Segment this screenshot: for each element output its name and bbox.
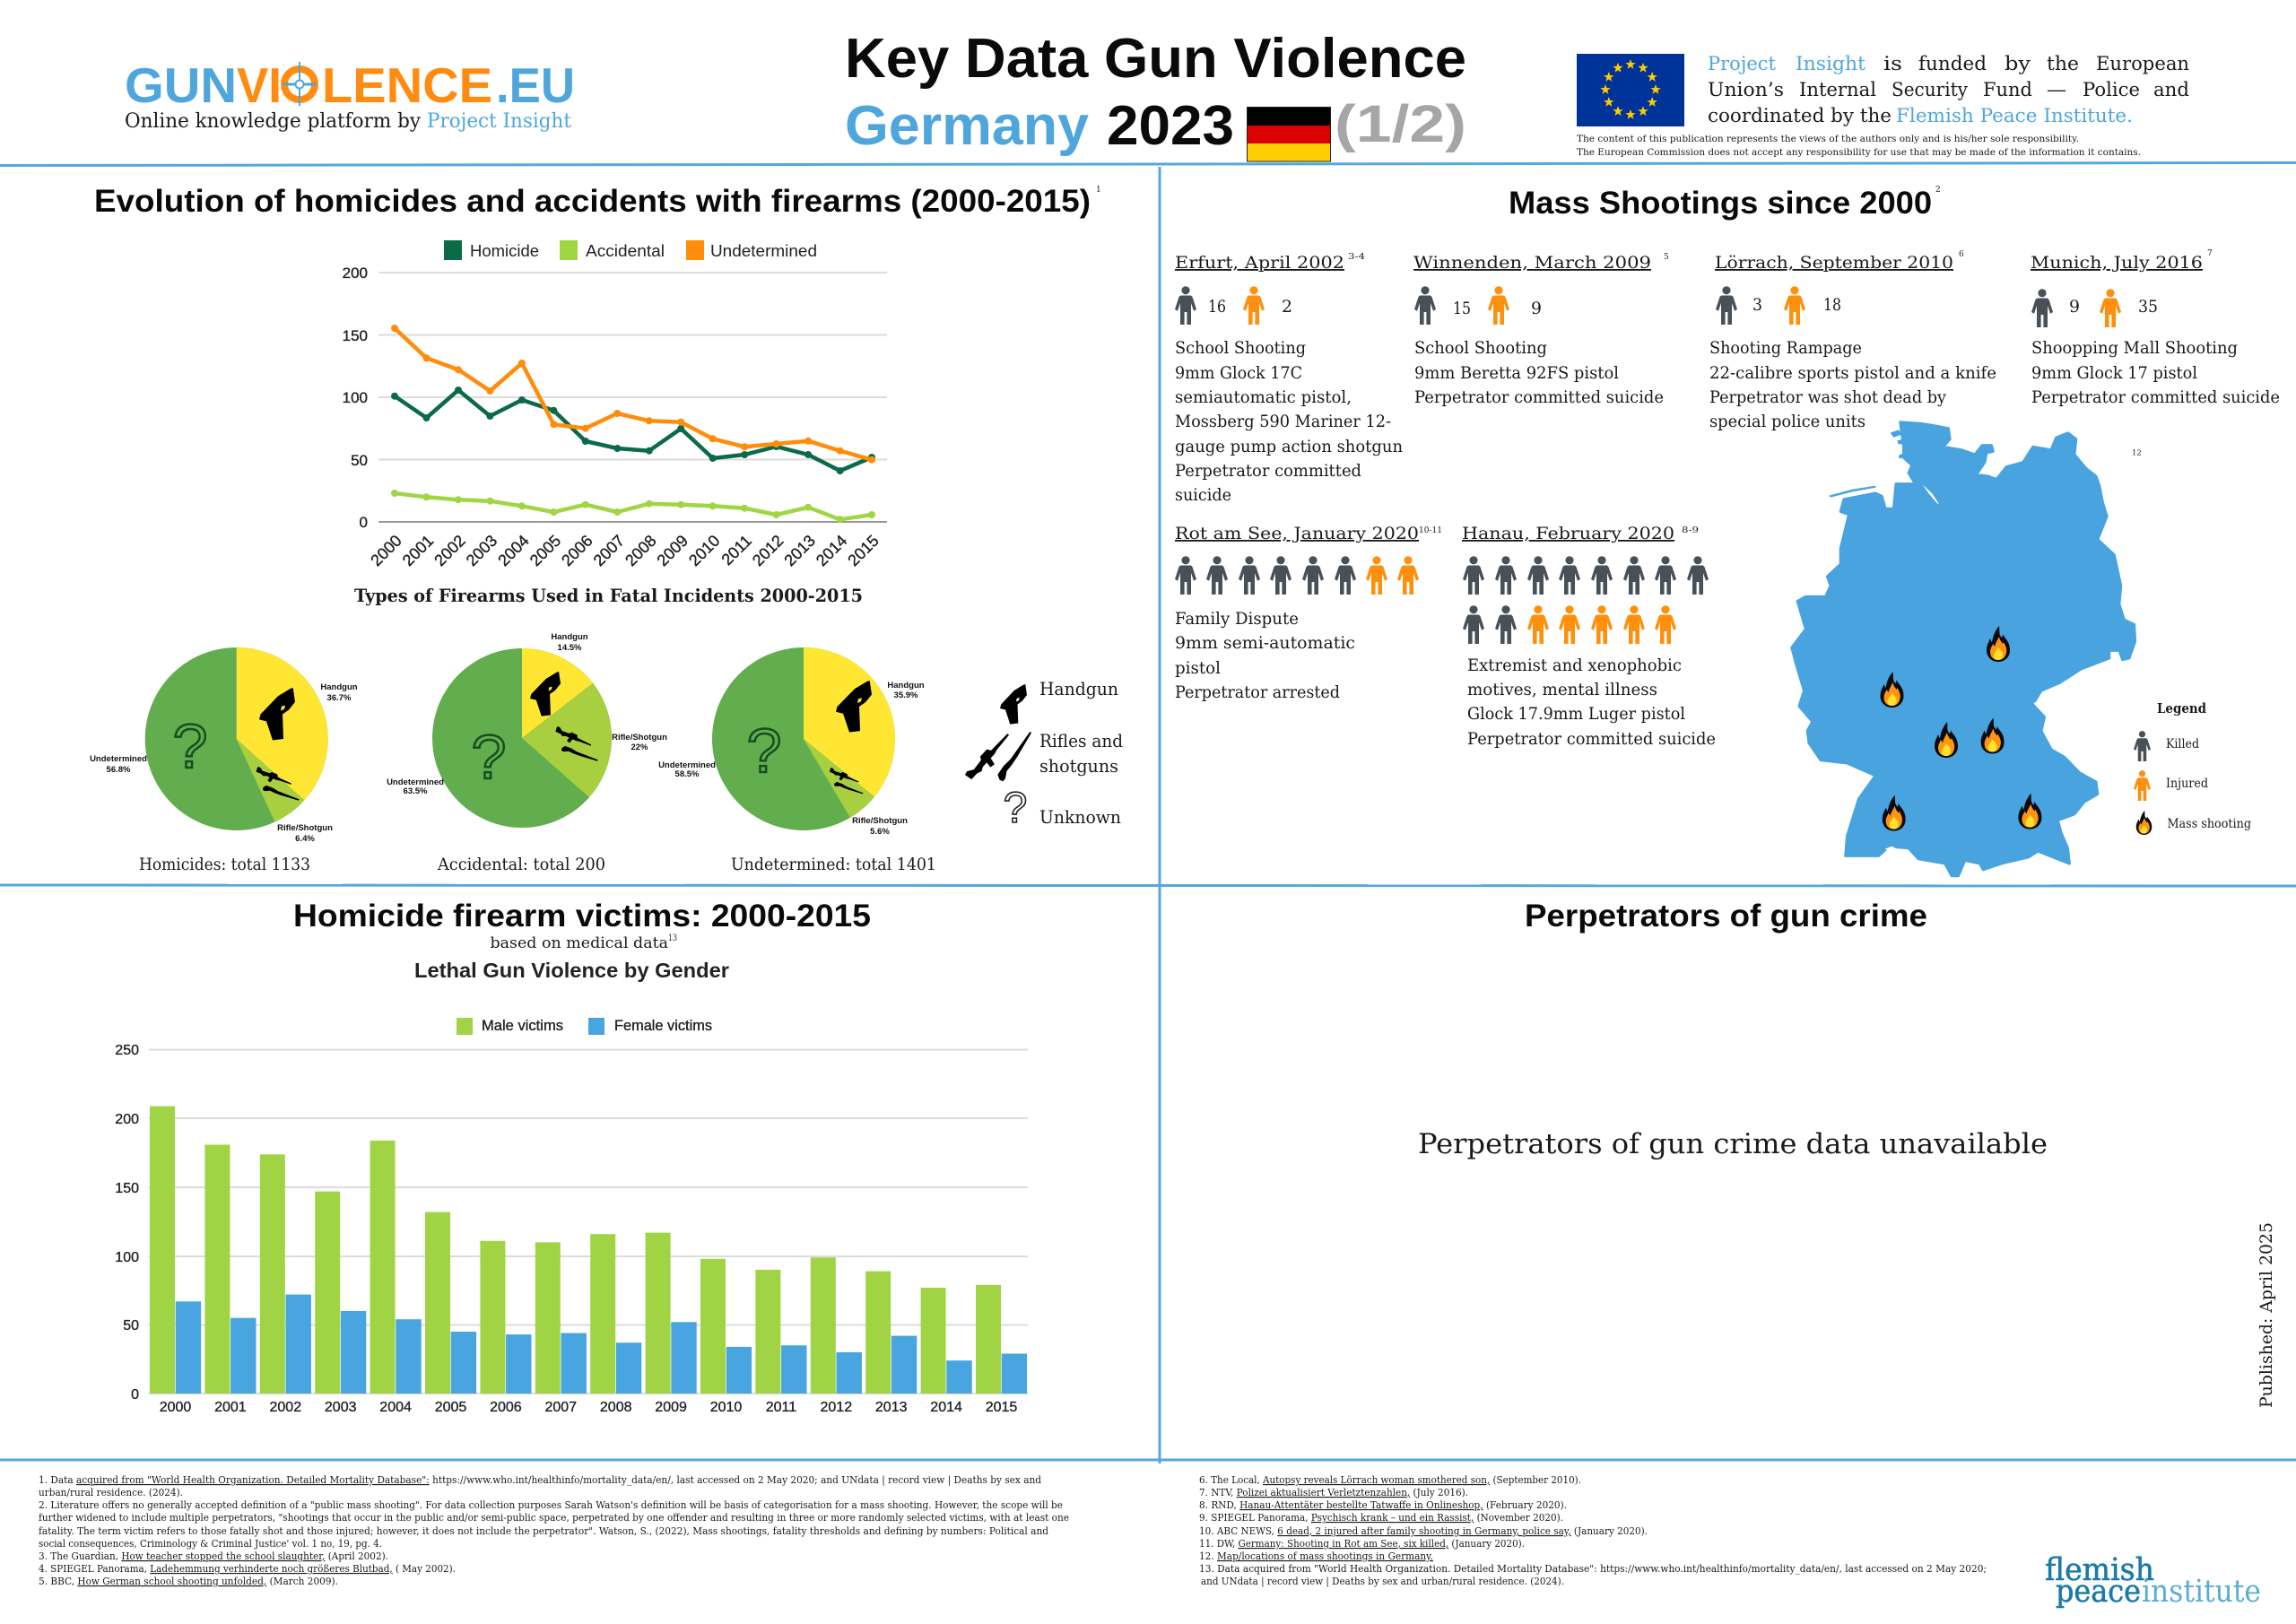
description: Lörrach [1709, 339, 1996, 431]
description: Winnenden [1414, 339, 1664, 407]
footnotes left [39, 1473, 1069, 1587]
footnotes left: 3. The Guardian, How teacher stopped the school slaughter, (April 2002). [39, 1550, 388, 1562]
funding statement: Police [2083, 79, 2140, 100]
footnotes left: urban/rural residence. (2024). [39, 1486, 183, 1498]
case: Winnenden: Winnenden, March 2009 [1413, 254, 1651, 273]
x axis labels: 2013 [875, 1400, 908, 1415]
x axis labels: 2005 [526, 532, 564, 569]
footnotes right: 7. NTV, Polizei aktualisiert Verletztenzahlen, (July 2016). [1199, 1486, 1468, 1498]
map of Germany [1792, 422, 2251, 876]
x axis labels: 2001 [399, 532, 437, 569]
y axis labels [115, 1043, 139, 1403]
y axis labels: 50 [123, 1318, 139, 1333]
case: Erfurt: 3-4 [1348, 253, 1365, 262]
footnotes left: 5. BBC, How German school shooting unfolded, (March 2009). [39, 1575, 338, 1587]
footnotes right: 12. Map/locations of mass shootings in Germany. [1199, 1550, 1433, 1562]
logo: flemish peace institute [2045, 1552, 2261, 1610]
case: Rot am See [1175, 525, 1442, 702]
subtitle: medical data: based on medical data [490, 934, 668, 952]
x axis labels: 2001 [214, 1400, 247, 1415]
x axis labels: 2004 [494, 532, 533, 569]
labels [90, 682, 358, 844]
icons: killed and injured [1716, 286, 1841, 325]
heading: types of firearms: Types of Firearms Used in Fatal Incidents 2000-2015 [354, 585, 863, 606]
icon: unknown: ? [173, 711, 207, 781]
logo target icon [283, 62, 316, 106]
description: Rot am See: Family Dispute [1175, 610, 1299, 629]
x axis labels: 2002 [430, 532, 469, 569]
description: Erfurt: gauge pump action shotgun [1175, 438, 1403, 456]
labels: Rifle/Shotgun [277, 823, 333, 833]
x axis labels: 2008 [600, 1400, 632, 1415]
x axis labels: 2012 [749, 532, 787, 569]
x axis labels: 2014 [813, 532, 850, 569]
logo tagline: Online knowledge platform by [125, 110, 422, 133]
panel: perpetrators [1418, 899, 2276, 1408]
labels: 22% [631, 743, 648, 752]
heading: evolution: Evolution of homicides and accidents with firearms (2000-2015) [94, 184, 1091, 219]
description: Erfurt: School Shooting [1175, 339, 1306, 358]
logo: flemish peace institute: institute [2142, 1574, 2261, 1610]
x axis labels: 2015 [986, 1400, 1017, 1415]
x axis labels: 2005 [435, 1400, 466, 1415]
description: Munich: Perpetrator committed suicide [2031, 388, 2280, 407]
icons: 6 killed, 2 injured [1175, 556, 1419, 595]
logo tagline: Project Insight [427, 110, 571, 133]
description: Rot am See: Perpetrator arrested [1175, 683, 1340, 702]
case: Erfurt [1175, 253, 1403, 505]
disclaimer [1577, 134, 2141, 158]
x axis labels: 2006 [490, 1400, 522, 1415]
description: Munich [2031, 339, 2280, 407]
icons: killed and injured [2031, 289, 2158, 327]
description: Lörrach: Shooting Rampage [1709, 339, 1862, 358]
case: Hanau [1462, 525, 1716, 749]
icon: German flag [1247, 107, 1331, 161]
y axis labels: 0 [360, 514, 368, 531]
case: Munich: 7 [2207, 249, 2213, 258]
x axis labels: 2014 [930, 1400, 962, 1415]
subtitle: Germany: Germany [845, 95, 1090, 157]
bar chart [115, 1043, 1028, 1415]
icons: killed and injured: 9 [1531, 299, 1542, 318]
legend: injured [2134, 770, 2208, 801]
pie chart: homicides [90, 647, 358, 844]
flames: mass shooting locations [1880, 626, 2041, 831]
bar chart legend [457, 1018, 712, 1035]
map legend: Legend [2157, 700, 2206, 716]
case: Munich: Munich, July 2016 [2031, 254, 2203, 273]
icons: killed and injured [1175, 286, 1292, 325]
heading: mass shootings: Mass Shootings since 2000 [1509, 186, 1932, 221]
funding statement [1708, 53, 2189, 126]
x axis labels: 2000 [160, 1400, 191, 1415]
labels: Undetermined [658, 760, 716, 770]
unavailable message: Perpetrators of gun crime data unavailable [1418, 1128, 2048, 1160]
y axis labels: 100 [115, 1250, 139, 1265]
icons: killed and injured: 9 [2069, 297, 2080, 317]
pie chart: accidental [387, 632, 667, 828]
x axis labels: 2012 [821, 1400, 852, 1415]
page indicator: (1/2) [1335, 95, 1466, 153]
description: Lörrach: 22-calibre sports pistol and a knife [1709, 364, 1996, 383]
y axis labels: 0 [131, 1387, 139, 1403]
icon: handgun [530, 672, 561, 716]
description: Erfurt [1175, 339, 1403, 505]
description: Erfurt: semiautomatic pistol, [1175, 388, 1352, 407]
footnotes right: 8. RND, Hanau-Attentäter bestellte Tatwaffe in Onlineshop, (February 2020). [1199, 1498, 1567, 1511]
icons: killed and injured [1414, 286, 1542, 325]
icon: handgun [1000, 684, 1027, 725]
funding statement: the [2047, 53, 2079, 74]
labels: Rifle/Shotgun [852, 816, 908, 826]
icon: rifle [553, 726, 593, 751]
footnotes left: further widened to include multiple perpetrators, "shootings that occur in the public and/or semi-public space, perpetrated by one offender and resulting in three or more randomly selected victims, with at least one [39, 1511, 1069, 1524]
disclaimer: The European Commission does not accept any responsibility for use that may be made of the information it contains. [1577, 147, 2141, 158]
pie caption: accidental: Accidental: total 200 [437, 855, 605, 874]
labels: 6.4% [295, 834, 315, 844]
footnote marker 1: 1 [1096, 186, 1101, 195]
label: rifles and shotguns: shotguns [1039, 755, 1118, 777]
x axis labels [160, 1400, 1017, 1415]
description: Hanau: Extremist and xenophobic [1467, 656, 1682, 675]
icon: shotgun [262, 783, 300, 806]
series: undetermined [391, 325, 875, 464]
publication date: Published: April 2025 [2257, 1222, 2276, 1408]
y axis labels: 250 [115, 1043, 139, 1058]
logo: flemish peace institute: peace [2056, 1574, 2141, 1610]
description: Hanau: motives, mental illness [1467, 681, 1657, 699]
funding statement: by [2005, 53, 2031, 74]
funding statement: European [2096, 53, 2189, 74]
x axis labels: 2010 [685, 532, 724, 569]
pie chart: undetermined [658, 647, 925, 837]
footnotes right: 10. ABC NEWS, 6 dead, 2 injured after family shooting in Germany, police say, (January 2020). [1199, 1524, 1648, 1537]
x axis labels: 2013 [780, 532, 819, 569]
icons: killed and injured: 15 [1453, 299, 1471, 318]
x axis labels: 2002 [270, 1400, 301, 1415]
footnotes right: 13. Data acquired from "World Health Organization. Detailed Mortality Database": https://www.who.int/healthinfo/mortality_data/en/, last accessed on 2 May 2020; [1199, 1562, 1987, 1575]
funding statement: Fund [1983, 79, 2032, 100]
funding statement: Flemish Peace Institute. [1896, 105, 2133, 126]
labels: 58.5% [675, 769, 700, 779]
logo tagline [125, 110, 571, 133]
case: Erfurt: Erfurt, April 2002 [1175, 254, 1344, 273]
description: Winnenden: 9mm Beretta 92FS pistol [1414, 364, 1619, 383]
labels: Handgun [551, 632, 588, 642]
case: Lörrach: 6 [1959, 250, 1964, 259]
y axis labels: 200 [115, 1112, 139, 1127]
description: Hanau: Perpetrator committed suicide [1467, 730, 1716, 749]
panel: homicide victims [115, 899, 1028, 1415]
x axis labels: 2010 [710, 1400, 742, 1415]
footnotes left: 2. Literature offers no generally accepted definition of a "public mass shooting". For data collection purposes Sarah Watson's definition will be basis of categorisation for a mass shooting. However, the scope will be [39, 1498, 1063, 1511]
line chart [343, 265, 887, 569]
series: accidental [391, 490, 875, 523]
x axis labels: 2007 [590, 532, 628, 569]
pie caption: undetermined: Undetermined: total 1401 [731, 855, 936, 874]
description: Erfurt: 9mm Glock 17C [1175, 364, 1302, 383]
funding statement: — [2047, 79, 2066, 100]
logo wordmark [125, 57, 575, 113]
description: Hanau [1467, 656, 1716, 749]
footnotes right: and UNdata | record view | Deaths by sex and urban/rural residence. (2024). [1201, 1575, 1564, 1588]
labels [658, 681, 925, 837]
icons: killed and injured: 35 [2138, 297, 2158, 317]
logo wordmark: GUN [125, 57, 237, 113]
icon: rifle [254, 767, 292, 790]
footnotes left: 1. Data acquired from "World Health Organization. Detailed Mortality Database": https://www.who.int/healthinfo/mortality_data/en/, last accessed on 2 May 2020; and UNdata | record view | Deaths by sex and [39, 1473, 1042, 1487]
labels: Handgun [887, 681, 925, 690]
description: Hanau: Glock 17.9mm Luger pistol [1467, 705, 1685, 724]
case: Winnenden [1413, 253, 1669, 407]
icon: unknown: ? [1004, 785, 1027, 832]
footnote marker 12: 12 [2132, 448, 2142, 457]
y axis labels: 100 [343, 389, 368, 406]
line chart legend: Undetermined [710, 242, 817, 260]
line chart legend: Homicide [470, 242, 539, 260]
chart title: Lethal Gun Violence by Gender [414, 959, 729, 982]
footnote marker 13: 13 [668, 934, 677, 943]
x axis labels: 2003 [325, 1400, 357, 1415]
labels: 14.5% [558, 643, 582, 653]
logo wordmark: .EU [496, 57, 575, 113]
description: Munich: Shoopping Mall Shooting [2031, 339, 2238, 358]
heading: homicide victims: Homicide firearm victims: 2000-2015 [293, 899, 871, 934]
icons: killed and injured: 16 [1208, 297, 1226, 317]
bar chart legend: Female victims [614, 1018, 712, 1034]
labels [387, 632, 667, 796]
disclaimer: The content of this publication represents the views of the authors only and is his/her sole responsibility. [1577, 134, 2079, 144]
labels: 63.5% [404, 786, 428, 796]
line chart legend: Accidental [586, 242, 665, 260]
funding statement: Project [1708, 53, 1777, 74]
footnotes left: social consequences, Criminology & Criminal Justice' vol. 1 no, 19, pg. 4. [39, 1537, 382, 1550]
description: Erfurt: Perpetrator committed [1175, 462, 1361, 481]
x axis labels: 2003 [463, 532, 500, 569]
icons: killed and injured: 2 [1282, 297, 1292, 317]
title [845, 28, 1466, 161]
description: Lörrach: Perpetrator was shot dead by [1709, 388, 1947, 407]
label: rifles and shotguns: Rifles and [1039, 730, 1123, 751]
pie caption: homicides: Homicides: total 1133 [139, 855, 310, 874]
y axis labels: 200 [343, 265, 368, 282]
logo wordmark: VI [237, 57, 282, 113]
icon: EU flag [1577, 54, 1684, 126]
funding statement: funded [1918, 53, 1987, 74]
case: Winnenden: 5 [1664, 253, 1669, 262]
funding statement: and [2153, 79, 2189, 100]
bars: male victims [150, 1107, 1001, 1394]
panel: mass shootings [1175, 186, 2280, 876]
subtitle: 2023: 2023 [1107, 95, 1234, 157]
description: Erfurt: suicide [1175, 486, 1231, 505]
funding statement: is [1883, 53, 1902, 74]
title: Key Data Gun Violence [845, 28, 1466, 90]
labels: Rifle/Shotgun [612, 733, 667, 743]
icons: killed and injured: 3 [1752, 295, 1762, 315]
x axis labels: 2011 [766, 1400, 796, 1415]
label: unknown: Unknown [1039, 806, 1121, 828]
icon: rifle [828, 768, 860, 786]
x axis labels: 2011 [718, 532, 755, 569]
heading: perpetrators: Perpetrators of gun crime [1525, 899, 1927, 934]
labels: Undetermined [90, 754, 147, 764]
x axis labels: 2007 [545, 1400, 577, 1415]
case: Rot am See: Rot am See, January 2020 [1175, 525, 1419, 543]
footnote marker 2: 2 [1935, 186, 1941, 195]
firearm legend [964, 678, 1123, 832]
icon: handgun [836, 681, 872, 733]
case: Rot am See: 10-11 [1419, 526, 1442, 535]
y axis labels [343, 265, 368, 531]
labels: 35.9% [894, 690, 918, 700]
icon: handgun [259, 688, 295, 741]
legend: mass shooting [2136, 811, 2251, 835]
bar chart legend: Male victims [482, 1018, 563, 1034]
x axis labels: 2015 [844, 532, 883, 569]
description: Rot am See [1175, 610, 1355, 702]
y axis labels: 150 [115, 1181, 139, 1196]
footnotes right [1199, 1473, 1987, 1588]
funding block [1577, 53, 2189, 158]
footnotes right: 9. SPIEGEL Panorama, Psychisch krank – und ein Rassist, (November 2020). [1199, 1511, 1563, 1524]
labels: 36.7% [327, 693, 352, 703]
logo: gunviolence.eu [125, 57, 575, 133]
description: Winnenden: School Shooting [1414, 339, 1547, 358]
x axis labels: 2008 [622, 532, 660, 569]
panel: evolution of homicides and accidents [94, 184, 1101, 569]
x axis labels: 2009 [655, 1400, 687, 1415]
logo: flemish peace institute: flemish [2045, 1552, 2154, 1588]
description: Rot am See: 9mm semi-automatic [1175, 634, 1355, 653]
icon: shotgun [833, 780, 864, 798]
labels: Undetermined [387, 777, 444, 787]
icon: rifle [964, 730, 1015, 785]
case: Hanau: Hanau, February 2020 [1462, 525, 1674, 543]
map legend [2134, 700, 2251, 835]
footnotes right: 11. DW, Germany: Shooting in Rot am See, six killed, (January 2020). [1199, 1537, 1525, 1550]
case: Hanau: 8-9 [1682, 526, 1699, 535]
label: handgun: Handgun [1039, 678, 1118, 699]
y axis labels: 50 [351, 452, 368, 469]
legend: injured: Injured [2166, 777, 2208, 791]
icon: shotgun [561, 743, 598, 767]
panel: types of firearms [90, 585, 1123, 874]
line chart legend [444, 240, 817, 260]
funding statement: Insight [1796, 53, 1866, 74]
legend: killed: Killed [2166, 737, 2199, 751]
x axis labels: 2004 [379, 1400, 412, 1415]
funding statement: Internal [1799, 79, 1876, 100]
x axis labels: 2009 [654, 532, 691, 569]
icon: unknown: ? [747, 716, 781, 786]
x axis labels: 2000 [367, 532, 405, 569]
case: Munich [2031, 249, 2280, 407]
case: Lörrach [1709, 250, 1996, 431]
bars: female victims [176, 1295, 1027, 1394]
description: Rot am See: pistol [1175, 659, 1221, 678]
funding statement: Union’s [1708, 79, 1784, 100]
labels: 56.8% [107, 765, 131, 775]
x axis labels: 2006 [558, 532, 596, 569]
label: rifles and shotguns [1039, 730, 1123, 777]
icons: 10 killed, 5 injured [1463, 556, 1709, 644]
series: homicide [391, 386, 875, 474]
x axis labels [367, 532, 883, 569]
icons: killed and injured: 18 [1823, 295, 1841, 315]
icon: unknown: ? [472, 722, 506, 792]
case: Lörrach: Lörrach, September 2010 [1715, 254, 1953, 273]
labels: Handgun [320, 682, 358, 692]
labels: 5.6% [870, 827, 890, 837]
footnotes right: 6. The Local, Autopsy reveals Lörrach woman smothered son, (September 2010). [1199, 1473, 1581, 1486]
description: Erfurt: Mossberg 590 Mariner 12- [1175, 413, 1391, 431]
description: Winnenden: Perpetrator committed suicide [1414, 388, 1664, 407]
y axis labels: 150 [343, 327, 368, 344]
legend: mass shooting: Mass shooting [2167, 817, 2251, 831]
footnotes left: fatality. The term victim refers to those fatally shot and those injured; however, it does not include the perpetrator". Watson, S., (2022), Mass shootings, fatality thresholds and defining by numbers: Political and [39, 1524, 1049, 1537]
description: Lörrach: special police units [1709, 413, 1866, 431]
logo wordmark: LENCE [322, 57, 492, 113]
description: Munich: 9mm Glock 17 pistol [2031, 364, 2197, 383]
funding statement: Security [1892, 79, 1968, 100]
funding statement: coordinated by the [1708, 105, 1892, 126]
footnotes left: 4. SPIEGEL Panorama, Ladehemmung verhinderte noch größeres Blutbad, ( May 2002). [39, 1562, 456, 1575]
legend: killed [2134, 731, 2199, 761]
icon: shotgun [994, 732, 1039, 782]
